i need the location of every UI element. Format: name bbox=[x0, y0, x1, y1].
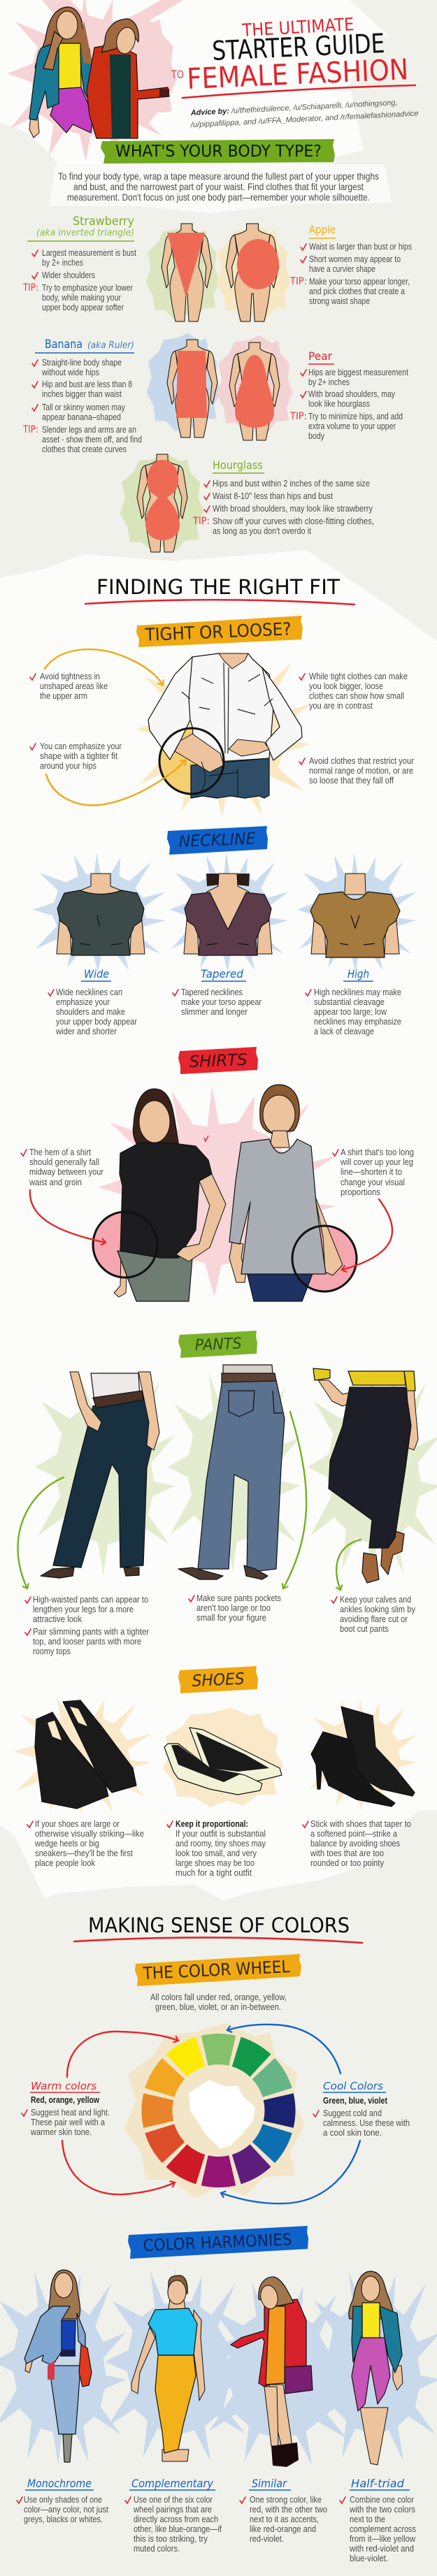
panel: hourglass text: Hourglass bbox=[213, 458, 263, 472]
text: tight or loose left: unshaped areas like bbox=[40, 681, 108, 691]
title: FEMALE FASHION bbox=[186, 52, 409, 96]
text: pants middle: small for your figure bbox=[196, 1613, 266, 1623]
text: shirt hem: midway between your bbox=[29, 1167, 103, 1177]
text: shoes middle: look too small, and very bbox=[175, 1848, 257, 1858]
figure: banana body bbox=[147, 333, 220, 437]
arrow: pants right bbox=[336, 1540, 361, 1590]
banner: tight or loose: TIGHT OR LOOSE? bbox=[144, 618, 292, 645]
text: tight or loose right: you are in contrast bbox=[309, 701, 373, 711]
text: monochrome: greys, blacks or whites. bbox=[24, 2515, 103, 2524]
text: shoes middle: large shoes may be too bbox=[175, 1858, 255, 1868]
text: complementary: wheel pairings that are bbox=[133, 2505, 212, 2515]
text: high neckline bbox=[306, 967, 401, 1036]
illustration: pointed boots bbox=[308, 1698, 417, 1810]
text: shoes middle: If your outfit is substantial bbox=[175, 1829, 266, 1839]
text: shoes left: wedge heels or big bbox=[34, 1839, 99, 1848]
title bbox=[171, 14, 415, 98]
panel: banana text: TIP: bbox=[22, 424, 38, 435]
text: tapered neckline: Tapered bbox=[201, 967, 244, 981]
text: shoes right: with toes that are too bbox=[310, 1848, 384, 1858]
arrow: pants middle bbox=[283, 1412, 306, 1589]
text: pants middle: aren't too large or too bbox=[196, 1603, 271, 1613]
text: pants right: Keep your calves and bbox=[340, 1595, 411, 1605]
panel: banana text: inches bigger than waist bbox=[42, 389, 122, 399]
panel: cool colors: Suggest cold and bbox=[323, 2108, 382, 2118]
text: monochrome: Monochrome bbox=[27, 2477, 92, 2490]
advice credits: Advice by: /u/thethirdsilence, /u/Schiaparelli, /u/nothingsong, bbox=[190, 99, 398, 117]
banner: the color wheel: THE COLOR WHEEL bbox=[142, 1957, 291, 1983]
panel: hourglass text: With broad shoulders, may look like strawberry bbox=[213, 504, 373, 514]
advice credits: /u/pippafilippa, and /u/FFA_Moderator, and /r/femalefashionadvice bbox=[190, 110, 419, 129]
figure: hourglass body bbox=[120, 454, 203, 552]
text: similar: next to it as accents, bbox=[250, 2515, 319, 2524]
text: tight or loose left: around your hips bbox=[40, 761, 96, 771]
text: shoes right bbox=[303, 1819, 411, 1868]
text: pants right bbox=[331, 1595, 416, 1634]
text: shoes middle: much for a tight outfit bbox=[175, 1868, 252, 1878]
title: TO bbox=[171, 68, 184, 81]
text: shirt length: line—shorten it to bbox=[341, 1167, 402, 1177]
text: wide neckline bbox=[48, 967, 137, 1036]
text: shirt length: proportions bbox=[341, 1187, 380, 1197]
panel: strawberry text: upper body appear softer bbox=[42, 303, 124, 312]
text: shoes left: otherwise visually striking—like bbox=[35, 1829, 144, 1839]
text: tapered neckline: Tapered necklines bbox=[181, 987, 243, 997]
text: shirt length bbox=[333, 1148, 414, 1197]
text: complementary bbox=[125, 2477, 222, 2554]
text: similar: red-violet. bbox=[250, 2534, 284, 2544]
panel: banana text: Tall or skinny women may bbox=[42, 403, 126, 412]
text: shoes middle: and roomy, tiny shoes may bbox=[175, 1839, 266, 1848]
panel: strawberry text: Largest measurement is bust bbox=[42, 248, 136, 258]
panel: hourglass text: Hips and bust within 2 inches of the same size bbox=[213, 479, 370, 489]
text: half-triad: with the two colors bbox=[349, 2505, 415, 2515]
panel: hourglass text: as long as you don't overdo it bbox=[213, 526, 311, 536]
banner: shoes bbox=[178, 1666, 258, 1693]
panel: warm colors bbox=[22, 2080, 110, 2137]
text: wide neckline: your upper body appear bbox=[56, 1017, 137, 1027]
panel: hourglass text bbox=[192, 458, 374, 536]
text: complementary: this is too striking, try bbox=[134, 2534, 208, 2544]
text: complementary: Use one of the six color bbox=[134, 2495, 213, 2505]
arrow: warm top bbox=[67, 2032, 178, 2077]
illustration: flats bbox=[163, 1708, 284, 1807]
text: tapered neckline: slimmer and longer bbox=[181, 1007, 248, 1017]
panel: apple text: have a curvier shape bbox=[309, 264, 375, 274]
figure: pear body bbox=[217, 335, 293, 440]
text: shirt length: A shirt that's too long bbox=[341, 1148, 414, 1157]
panel: banana text: Slender legs and arms are an bbox=[42, 425, 136, 435]
panel: cool colors: Cool Colors bbox=[323, 2080, 383, 2092]
panel: strawberry text: (aka inverted triangle) bbox=[36, 228, 134, 238]
text: pants left: attractive look bbox=[33, 1614, 83, 1624]
text: color wheel intro: All colors fall under red, orange, yellow, bbox=[150, 1992, 287, 2002]
heading: making sense of colors: MAKING SENSE OF COLORS bbox=[88, 1913, 350, 1937]
banner: pants: PANTS bbox=[194, 1335, 242, 1354]
banner: neckline bbox=[167, 826, 268, 855]
panel: cool colors: Green, blue, violet bbox=[323, 2096, 388, 2106]
text: half-triad: complement across bbox=[350, 2524, 416, 2534]
illustration: pants figures bbox=[35, 1365, 437, 1583]
text: shirt hem: waist and groin bbox=[29, 1178, 82, 1187]
text: tight or loose left bbox=[30, 672, 122, 771]
text: shoes middle bbox=[167, 1819, 266, 1878]
panel: cool colors: calmness. Use these with bbox=[323, 2118, 410, 2128]
panel: pear text bbox=[289, 349, 408, 441]
text: half-triad: next to the bbox=[350, 2515, 385, 2524]
text: tight or loose right: clothes can show how small bbox=[309, 691, 404, 701]
text: tight or loose right bbox=[299, 672, 414, 786]
illustration: half-triad outfit bbox=[308, 2268, 437, 2465]
text: pants right: avoiding flare cut or bbox=[340, 1614, 408, 1624]
text: shoes middle: Keep it proportional: bbox=[175, 1819, 248, 1829]
text: shoes left bbox=[27, 1819, 144, 1868]
heading: finding the right fit: FINDING THE RIGHT FIT bbox=[96, 575, 340, 599]
panel: pear text: by 2+ inches bbox=[308, 377, 350, 387]
text: wide neckline: shoulders and make bbox=[56, 1007, 125, 1017]
text: high neckline: substantial cleavage bbox=[314, 997, 385, 1007]
banner: shirts bbox=[178, 1047, 258, 1074]
text: high neckline: necklines may emphasize bbox=[314, 1017, 401, 1027]
panel: pear text: TIP: bbox=[289, 411, 307, 422]
figure: skinny pants bbox=[313, 1368, 418, 1583]
woman in red jacket bbox=[87, 19, 169, 138]
text: similar: One strong color, like bbox=[250, 2495, 322, 2505]
woman: too-long shirt bbox=[229, 1085, 357, 1301]
text: monochrome: color—any color, not just bbox=[24, 2505, 108, 2515]
intro paragraph bbox=[58, 171, 379, 203]
panel: strawberry text: Wider shoulders bbox=[42, 270, 95, 280]
text: tight or loose right: Avoid clothes that restrict your bbox=[309, 756, 414, 766]
text: half-triad: from it—like yellow bbox=[350, 2534, 416, 2544]
intro paragraph: and bust, and the narrowest part of your waist. Find clothes that fit your largest bbox=[73, 181, 364, 192]
text: pants right: boot cut pants bbox=[340, 1624, 389, 1634]
figure: jeans pockets bbox=[178, 1365, 285, 1579]
banner: what's your body type: WHAT'S YOUR BODY TYPE? bbox=[115, 143, 322, 161]
text: similar bbox=[240, 2477, 327, 2544]
text: wide neckline: Wide bbox=[84, 967, 109, 981]
text: pants left bbox=[25, 1595, 149, 1656]
panel: banana text: clothes that create curves bbox=[42, 444, 127, 454]
panel: strawberry text bbox=[22, 215, 136, 312]
text: tight or loose right: you look bigger, loose bbox=[309, 681, 383, 691]
text: high neckline: a lack of cleavage bbox=[314, 1027, 374, 1036]
text: shirt hem bbox=[21, 1148, 103, 1187]
panel: strawberry text: Try to emphasize your lower bbox=[42, 283, 133, 293]
panel: hourglass text: TIP: bbox=[192, 516, 210, 527]
illustration: wide neckline bbox=[33, 853, 166, 971]
panel: apple text: TIP: bbox=[289, 276, 307, 287]
text: high neckline: High bbox=[348, 967, 369, 981]
text: shirt hem: should generally fall bbox=[29, 1157, 99, 1167]
text: tight or loose right: normal range of motion, or are bbox=[309, 766, 413, 776]
text: shoes right: balance by avoiding shoes bbox=[310, 1839, 400, 1848]
panel: warm colors: Red, orange, yellow bbox=[31, 2095, 99, 2105]
text: half-triad: blue-violet. bbox=[350, 2554, 388, 2563]
panel: pear text: With broad shoulders, may bbox=[308, 389, 396, 399]
panel: apple text: and pick clothes that create a bbox=[309, 287, 405, 296]
banner: color harmonies bbox=[128, 2226, 308, 2259]
text: shirt hem: The hem of a shirt bbox=[29, 1148, 91, 1157]
text: pants left: top, and looser pants with more bbox=[33, 1637, 141, 1647]
woman in teal jacket bbox=[29, 7, 94, 138]
arrow: shirts right bbox=[342, 1199, 392, 1270]
text: shirt length: change your visual bbox=[341, 1178, 405, 1187]
text: complementary: other, like blue-orange—if bbox=[134, 2524, 222, 2534]
panel: cool colors: a cool skin tone. bbox=[323, 2128, 382, 2138]
panel: apple text: Make your torso appear longer, bbox=[309, 277, 410, 287]
panel: strawberry text: body, while making your bbox=[42, 293, 121, 303]
text: monochrome: Use only shades of one bbox=[24, 2495, 102, 2505]
text: pants middle: Make sure pants pockets bbox=[196, 1593, 281, 1603]
illustration: tapered neckline bbox=[169, 853, 288, 971]
panel: banana text: (aka Ruler) bbox=[87, 340, 134, 351]
panel: warm colors: Warm colors bbox=[31, 2080, 96, 2092]
panel: apple text bbox=[289, 223, 412, 306]
text: shoes right: rounded or too pointy bbox=[310, 1858, 385, 1868]
text: wide neckline: emphasize your bbox=[56, 997, 110, 1007]
text: similar: like red-orange and bbox=[250, 2524, 316, 2534]
illustration: high neckline bbox=[297, 853, 416, 971]
text: half-triad: Half-triad bbox=[351, 2477, 405, 2490]
text: high neckline: appear too large; low bbox=[314, 1007, 387, 1017]
text: tight or loose left: the upper arm bbox=[40, 691, 87, 701]
panel: apple text: Short women may appear to bbox=[309, 254, 401, 264]
panel: hourglass text: Show off your curves with close-fitting clothes, bbox=[213, 516, 374, 526]
intro paragraph: measurement. Don't focus on just one body part—remember your whole silhouette. bbox=[67, 191, 370, 203]
panel: strawberry text: Strawberry bbox=[73, 215, 134, 229]
illustration: similar outfit bbox=[206, 2277, 353, 2467]
text: tapered neckline: make your torso appear bbox=[181, 997, 262, 1007]
panel: pear text: Try to minimize hips, and add bbox=[308, 412, 403, 421]
text: pants right: ankles looking slim by bbox=[340, 1605, 416, 1614]
text: pants left: lengthen your legs for a more bbox=[33, 1605, 134, 1614]
arrow: cool bottom bbox=[221, 2141, 360, 2204]
panel: banana text: Banana bbox=[45, 338, 83, 352]
panel: warm colors: Suggest heat and light. bbox=[31, 2108, 110, 2118]
woman: correct shirt length bbox=[93, 1089, 226, 1301]
text: pants left: roomy tops bbox=[33, 1647, 71, 1656]
panel: hourglass text: Waist 8-10" less than hips and bust bbox=[213, 491, 333, 501]
banner: color harmonies: COLOR HARMONIES bbox=[143, 2231, 292, 2255]
panel: banana text bbox=[22, 338, 142, 454]
figure: strawberry body bbox=[146, 224, 220, 321]
text: tight or loose left: You can emphasize your bbox=[40, 741, 122, 751]
text: shoes left: If your shoes are large or bbox=[35, 1819, 120, 1829]
banner: shoes: SHOES bbox=[192, 1670, 245, 1691]
text: wide neckline: Wide necklines can bbox=[56, 987, 122, 997]
panel: apple text: Waist is larger than bust or hips bbox=[309, 242, 412, 252]
panel: strawberry text: by 2+ inches bbox=[42, 258, 83, 268]
title: THE ULTIMATE bbox=[241, 14, 354, 41]
panel: apple text: strong waist shape bbox=[309, 296, 370, 306]
text: tight or loose left: Avoid tightness in bbox=[40, 672, 100, 681]
figure: high-waisted pants bbox=[41, 1372, 159, 1578]
text: shirt length: will cover up your leg bbox=[340, 1157, 413, 1167]
text: tight or loose right: so loose that they fall off bbox=[309, 776, 394, 786]
panel: cool colors bbox=[313, 2080, 410, 2138]
text: shoes left: place people look bbox=[35, 1858, 96, 1868]
text: tapered neckline bbox=[173, 967, 262, 1017]
text: shoes right: Stick with shoes that taper to bbox=[310, 1819, 411, 1829]
text: shoes right: a softened point—strike a bbox=[310, 1829, 397, 1839]
arrow: pants left bbox=[18, 1477, 64, 1589]
text: half-triad: with red-violet and bbox=[349, 2544, 414, 2554]
chart: color wheel bbox=[124, 2023, 305, 2198]
text: wide neckline: wider and shorter bbox=[55, 1027, 117, 1036]
figure: apple body bbox=[217, 224, 290, 321]
arrow: warm bottom bbox=[62, 2141, 175, 2194]
panel: warm colors: These pair well with a bbox=[31, 2118, 105, 2127]
text: pants left: High-waisted pants can appear to bbox=[33, 1595, 148, 1605]
banner: what's your body type bbox=[101, 139, 335, 164]
text: pants middle bbox=[189, 1593, 281, 1623]
text: complementary: muted colors. bbox=[134, 2544, 180, 2554]
arrow: shirts left bbox=[30, 1190, 106, 1243]
arrow: bottom orange bbox=[46, 760, 185, 805]
text: complementary: Complementary bbox=[131, 2477, 213, 2490]
panel: apple text: Apple bbox=[309, 223, 336, 236]
title: STARTER GUIDE bbox=[211, 28, 385, 66]
text: color wheel intro bbox=[150, 1992, 287, 2012]
illustration: two women shirts bbox=[93, 1085, 357, 1301]
text: high neckline: High necklines may make bbox=[314, 987, 401, 997]
text: pants left: Pair slimming pants with a tighter bbox=[33, 1627, 149, 1637]
panel: banana text: Straight-line body shape bbox=[42, 358, 122, 368]
panel: strawberry text: TIP: bbox=[22, 282, 38, 294]
panel: banana text: without wide hips bbox=[41, 368, 99, 377]
panel: banana text: appear banana–shaped bbox=[42, 412, 121, 422]
text: complementary: directly across from each bbox=[134, 2515, 218, 2524]
panel: banana text: asset - show them off, and find bbox=[42, 435, 142, 444]
text: similar: red, with the other two bbox=[250, 2505, 327, 2515]
panel: warm colors: warmer skin tone. bbox=[30, 2127, 92, 2137]
panel: pear text: Hips are biggest measurement bbox=[308, 368, 408, 377]
text: color wheel intro: green, blue, violet, or an in-between. bbox=[155, 2002, 281, 2012]
advice credits bbox=[190, 99, 419, 129]
panel: banana text: Hip and bust are less than 8 bbox=[42, 379, 132, 389]
intro paragraph: To find your body type, wrap a tape measure around the fullest part of your upper thighs bbox=[58, 171, 379, 182]
arrow: top orange bbox=[45, 649, 163, 685]
banner: neckline: NECKLINE bbox=[178, 830, 257, 851]
panel: pear text: look like hourglass bbox=[308, 399, 370, 409]
illustration: two women header bbox=[29, 7, 169, 138]
text: half-triad: Combine one color bbox=[350, 2495, 414, 2505]
illustration: monochrome outfit bbox=[0, 2268, 126, 2463]
illustration: complementary outfit bbox=[105, 2268, 252, 2463]
panel: pear text: body bbox=[308, 431, 325, 441]
banner: pants bbox=[178, 1331, 257, 1358]
text: shoes left: sneakers—they'll be the first bbox=[35, 1848, 133, 1858]
arrow: cool top bbox=[227, 2025, 341, 2074]
text: monochrome bbox=[17, 2477, 108, 2524]
text: tight or loose right: While tight clothes can make bbox=[309, 672, 408, 681]
illustration: shirt fit bbox=[136, 649, 311, 816]
banner: shirts: SHIRTS bbox=[189, 1051, 248, 1071]
splash: pink behind header figures bbox=[7, 0, 183, 161]
text: tight or loose left: shape with a tighter fit bbox=[40, 751, 117, 761]
panel: pear text: Pear bbox=[308, 349, 332, 363]
illustration: wedge heels bbox=[14, 1695, 151, 1814]
text: half-triad bbox=[340, 2477, 416, 2563]
text: similar: Similar bbox=[252, 2477, 287, 2490]
panel: pear text: extra volume to your upper bbox=[308, 421, 396, 431]
